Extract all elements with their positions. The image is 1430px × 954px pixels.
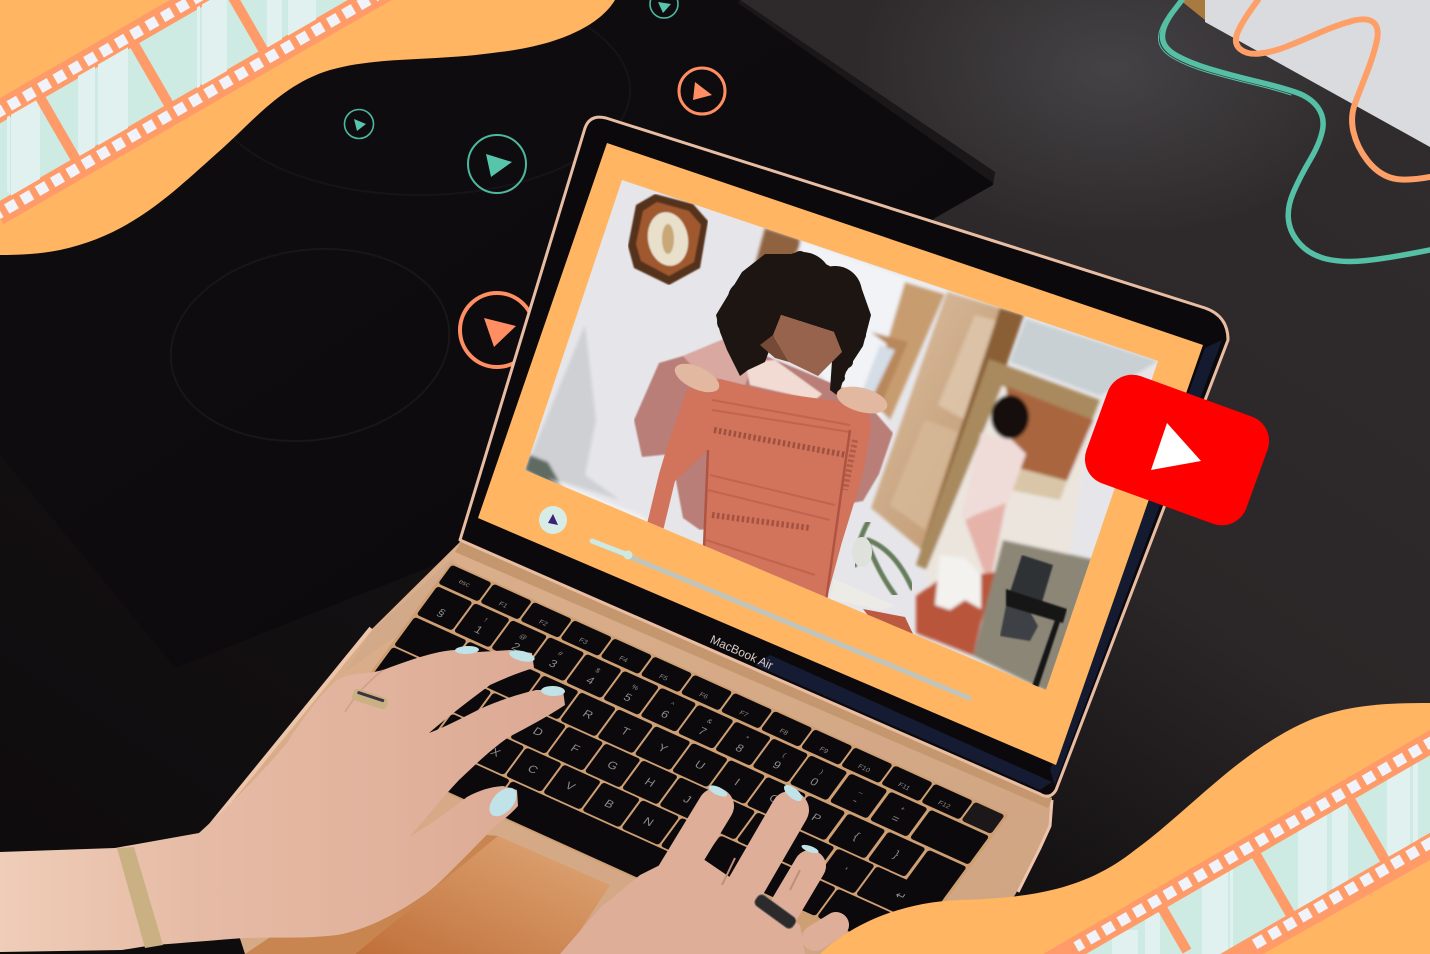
plant <box>855 522 912 595</box>
function key row: F5 <box>657 674 669 682</box>
wall corner top right <box>1180 0 1430 147</box>
icon: tiny teal play button at top <box>650 0 678 18</box>
number key row: & <box>705 718 714 726</box>
number key row: 4 <box>583 674 597 687</box>
lower key row: C <box>525 763 541 777</box>
number key row: $ <box>594 668 601 675</box>
bracelet <box>117 847 163 948</box>
number key row <box>416 586 989 865</box>
function key row: F1 <box>497 601 509 610</box>
number key row: 6 <box>658 708 672 721</box>
home key row: ; <box>799 847 810 859</box>
number key row: @ <box>518 633 528 642</box>
video player play button <box>539 506 567 534</box>
lower key row: V <box>563 780 577 793</box>
QWERTY key row: R <box>580 708 595 721</box>
function key row <box>438 565 1005 834</box>
number key row: + <box>898 806 906 813</box>
squiggle: orange brush line <box>1236 0 1430 180</box>
dark ring <box>753 893 798 930</box>
number key row: ( <box>781 752 788 759</box>
icon: orange play button <box>679 68 725 114</box>
function key row: esc <box>457 579 472 589</box>
video photo: woman holding a sweater <box>520 180 1160 692</box>
QWERTY key row: { <box>851 831 862 842</box>
QWERTY key row: Y <box>655 742 670 755</box>
number key row: * <box>743 735 750 742</box>
number key row: 1 <box>472 624 485 637</box>
number key row: - <box>850 795 861 807</box>
number key row: 0 <box>807 776 821 789</box>
function key row: F12 <box>936 800 952 810</box>
home key row: L <box>758 828 772 841</box>
QWERTY key row: I <box>732 777 742 788</box>
lower key row: N <box>641 815 656 829</box>
number key row: ) <box>818 769 824 776</box>
function key row: F2 <box>537 619 549 628</box>
lower key row: B <box>602 798 617 811</box>
number key row: 5 <box>621 691 635 704</box>
woman: hair and face <box>716 251 871 396</box>
home key row: J <box>681 793 693 806</box>
QWERTY key row: P <box>809 812 824 825</box>
number key row: 2 <box>509 641 522 653</box>
MacBook Air label: MacBook Air <box>708 632 775 672</box>
right hand <box>560 782 836 954</box>
number key row: # <box>556 651 564 658</box>
number key row: = <box>888 813 902 826</box>
number key row: 3 <box>546 658 560 670</box>
function key row: F11 <box>896 782 911 792</box>
black pad on the desk <box>0 0 995 668</box>
function key row: F4 <box>617 655 629 664</box>
function key row: F3 <box>577 637 589 646</box>
fingernails <box>455 646 565 821</box>
home key row: ' <box>840 866 849 876</box>
function key row: F6 <box>698 692 709 701</box>
function key row: F9 <box>818 746 830 755</box>
held sweater <box>646 379 871 601</box>
home key row: H <box>642 776 657 790</box>
icon: teal play button <box>468 135 526 193</box>
lower key row: M <box>679 833 696 847</box>
space bar row <box>327 707 756 922</box>
film strip bottom right <box>1043 730 1430 954</box>
video progress bar <box>592 541 969 698</box>
QWERTY key row: T <box>618 725 632 738</box>
laptop screen bezel <box>460 117 1228 796</box>
phone on a tripod <box>1000 555 1067 688</box>
function key row: F8 <box>778 728 789 737</box>
home key row: D <box>530 725 546 739</box>
orange blob top left <box>0 0 615 255</box>
function key row: F10 <box>856 764 871 774</box>
fingernails <box>707 782 819 855</box>
orange video frame on screen <box>478 143 1203 765</box>
laptop base <box>205 540 1052 954</box>
wall picture <box>628 194 708 285</box>
function key row: F7 <box>738 710 749 719</box>
keyboard <box>323 562 1009 954</box>
squiggle: teal brush line <box>1158 0 1430 261</box>
number key row: 7 <box>695 725 709 738</box>
QWERTY key row: U <box>692 759 707 772</box>
woman: sleeves and upper sweater <box>634 339 893 530</box>
home key row <box>372 647 945 925</box>
icon: small teal play button <box>344 110 374 138</box>
number key row: 9 <box>770 759 784 772</box>
number key row: ! <box>483 617 488 624</box>
lower key row: X <box>488 746 503 759</box>
number key row: § <box>434 607 448 620</box>
blurred room background <box>525 228 1158 692</box>
home key row: G <box>604 759 620 773</box>
ring <box>351 688 389 710</box>
QWERTY key row: } <box>891 849 902 860</box>
woman: hands <box>674 364 888 414</box>
number key row: _ <box>857 787 866 795</box>
left hand <box>0 646 565 952</box>
number key row: ^ <box>668 702 676 709</box>
home key row: F <box>568 742 582 755</box>
lower key row <box>350 677 892 942</box>
orange blob bottom right <box>820 703 1430 954</box>
number key row: % <box>630 684 640 692</box>
home key row: ↵ <box>892 889 909 903</box>
icon: YouTube logo <box>1078 367 1276 533</box>
number key row: 8 <box>733 742 747 755</box>
trackpad <box>245 830 610 954</box>
icon: large orange play button behind the laptop <box>460 293 534 367</box>
QWERTY key row <box>372 617 967 925</box>
QWERTY key row: O <box>766 792 782 806</box>
film strip top left <box>0 0 392 224</box>
home key row: K <box>717 810 732 823</box>
